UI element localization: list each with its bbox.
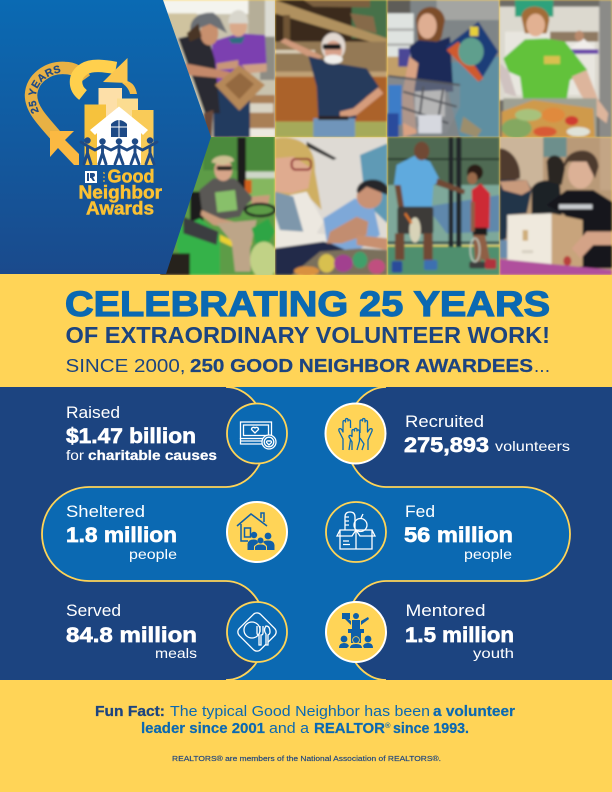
panel: right navy ribbon bbox=[346, 387, 612, 680]
stat: mentored: 1.5 million bbox=[405, 623, 514, 647]
stat: raised bbox=[66, 404, 217, 463]
stat: served bbox=[66, 602, 197, 661]
stat: sheltered: 1.8 million bbox=[66, 523, 177, 547]
photo: man in sunglasses at a wooden structure bbox=[275, 0, 387, 137]
stat: sheltered: Sheltered bbox=[66, 503, 145, 521]
outline: right ribbon bbox=[346, 387, 570, 680]
logo wordmark: Neighbor bbox=[78, 182, 162, 202]
logo wordmark: Awards bbox=[86, 198, 154, 218]
fun fact text: ® bbox=[385, 721, 391, 730]
logo upper arrowhead bbox=[103, 58, 128, 83]
icon: speaker at podium bbox=[326, 602, 386, 662]
photo: smiling woman serving salad bbox=[499, 0, 612, 138]
stat: sheltered bbox=[66, 503, 177, 562]
fun fact text: Fun Fact: bbox=[95, 704, 165, 720]
panel: header logo background bbox=[0, 0, 211, 274]
subheading: since 2000: ... bbox=[534, 355, 550, 376]
stat: raised: for bbox=[66, 448, 85, 463]
subheading: since 2000: 250 GOOD NEIGHBOR AWARDEES bbox=[190, 355, 533, 376]
subheading: since 2000 bbox=[66, 355, 550, 376]
icon: food box bbox=[326, 502, 386, 562]
photo: man on a green tractor bbox=[160, 135, 278, 278]
stat: raised: Raised bbox=[66, 404, 120, 422]
fun fact text: a volunteer bbox=[433, 704, 515, 720]
footnote: REALTORS® are members of the National Association of REALTORS®. bbox=[172, 754, 441, 763]
stat: fed: Fed bbox=[405, 503, 435, 521]
heading: celebrating 25 years: CELEBRATING 25 YEARS bbox=[65, 285, 550, 324]
logo wordmark bbox=[78, 166, 162, 218]
fun fact text: The typical Good Neighbor has been bbox=[170, 704, 430, 720]
panel: stats background bbox=[0, 387, 612, 680]
logo 25 years curved text: 25 YEARS bbox=[28, 66, 60, 114]
icon: house and family bbox=[227, 502, 287, 562]
photo: woman and man with beads bbox=[275, 137, 387, 276]
logo house bbox=[90, 106, 148, 165]
stat: mentored bbox=[405, 602, 514, 661]
panel: left navy ribbon bbox=[0, 387, 266, 680]
logo realtor mark bbox=[85, 171, 106, 183]
logo lower arrowhead bbox=[50, 131, 79, 165]
stat: raised: $1.47 billion bbox=[66, 424, 196, 448]
stat: fed: people bbox=[464, 546, 512, 562]
logo upper arrow tail bbox=[122, 81, 137, 94]
icon: money with heart bbox=[227, 404, 287, 464]
fun fact text: REALTOR bbox=[314, 721, 386, 737]
stat: mentored: Mentored bbox=[406, 602, 486, 620]
logo realtor mark: A bbox=[103, 175, 106, 179]
logo realtor mark: R bbox=[103, 179, 106, 183]
logo realtor mark: N bbox=[103, 171, 105, 175]
photo: man and boy on a tennis court bbox=[387, 137, 500, 275]
photo: two volunteers with a cardboard box bbox=[160, 0, 277, 137]
outline: left ribbon bbox=[42, 387, 266, 680]
logo people holding hands bbox=[81, 139, 157, 164]
stat: recruited: Recruited bbox=[405, 413, 484, 431]
logo heart ribbon bbox=[31, 68, 85, 137]
photo: woman shopping with a cart bbox=[387, 0, 499, 137]
logo: Good Neighbor Awards 25 years bbox=[24, 58, 162, 218]
logo wordmark: Good bbox=[108, 166, 154, 186]
logo buildings bbox=[84, 88, 154, 165]
icon: plate and cutlery in diamond bbox=[227, 602, 287, 662]
fun fact text: and a bbox=[269, 721, 310, 737]
stat: sheltered: people bbox=[129, 546, 177, 562]
icon: raised hands bbox=[326, 404, 386, 464]
stat: recruited: 275,893 bbox=[404, 433, 489, 457]
heading: of extraordinary volunteer work: OF EXTRAORDINARY VOLUNTEER WORK! bbox=[66, 322, 550, 348]
stat: served: meals bbox=[155, 645, 197, 661]
subheading: since 2000: SINCE 2000, bbox=[66, 355, 186, 376]
photo: volunteer in Compass shirt packing a box bbox=[500, 137, 612, 275]
fun fact text: since 1993. bbox=[393, 721, 469, 737]
fun fact text: leader since 2001 bbox=[141, 721, 265, 737]
stat: recruited: volunteers bbox=[495, 438, 570, 454]
fun fact text bbox=[95, 704, 515, 737]
stat: fed: 56 million bbox=[404, 523, 513, 547]
logo upper arrow ribbon bbox=[76, 66, 116, 95]
stat: raised: charitable causes bbox=[88, 448, 217, 463]
stat: served: Served bbox=[66, 602, 121, 620]
stat: served: 84.8 million bbox=[66, 623, 197, 647]
photo collage bbox=[160, 0, 612, 278]
stat: fed bbox=[404, 503, 513, 562]
stat: mentored: youth bbox=[473, 645, 514, 661]
stat: recruited bbox=[404, 413, 570, 457]
